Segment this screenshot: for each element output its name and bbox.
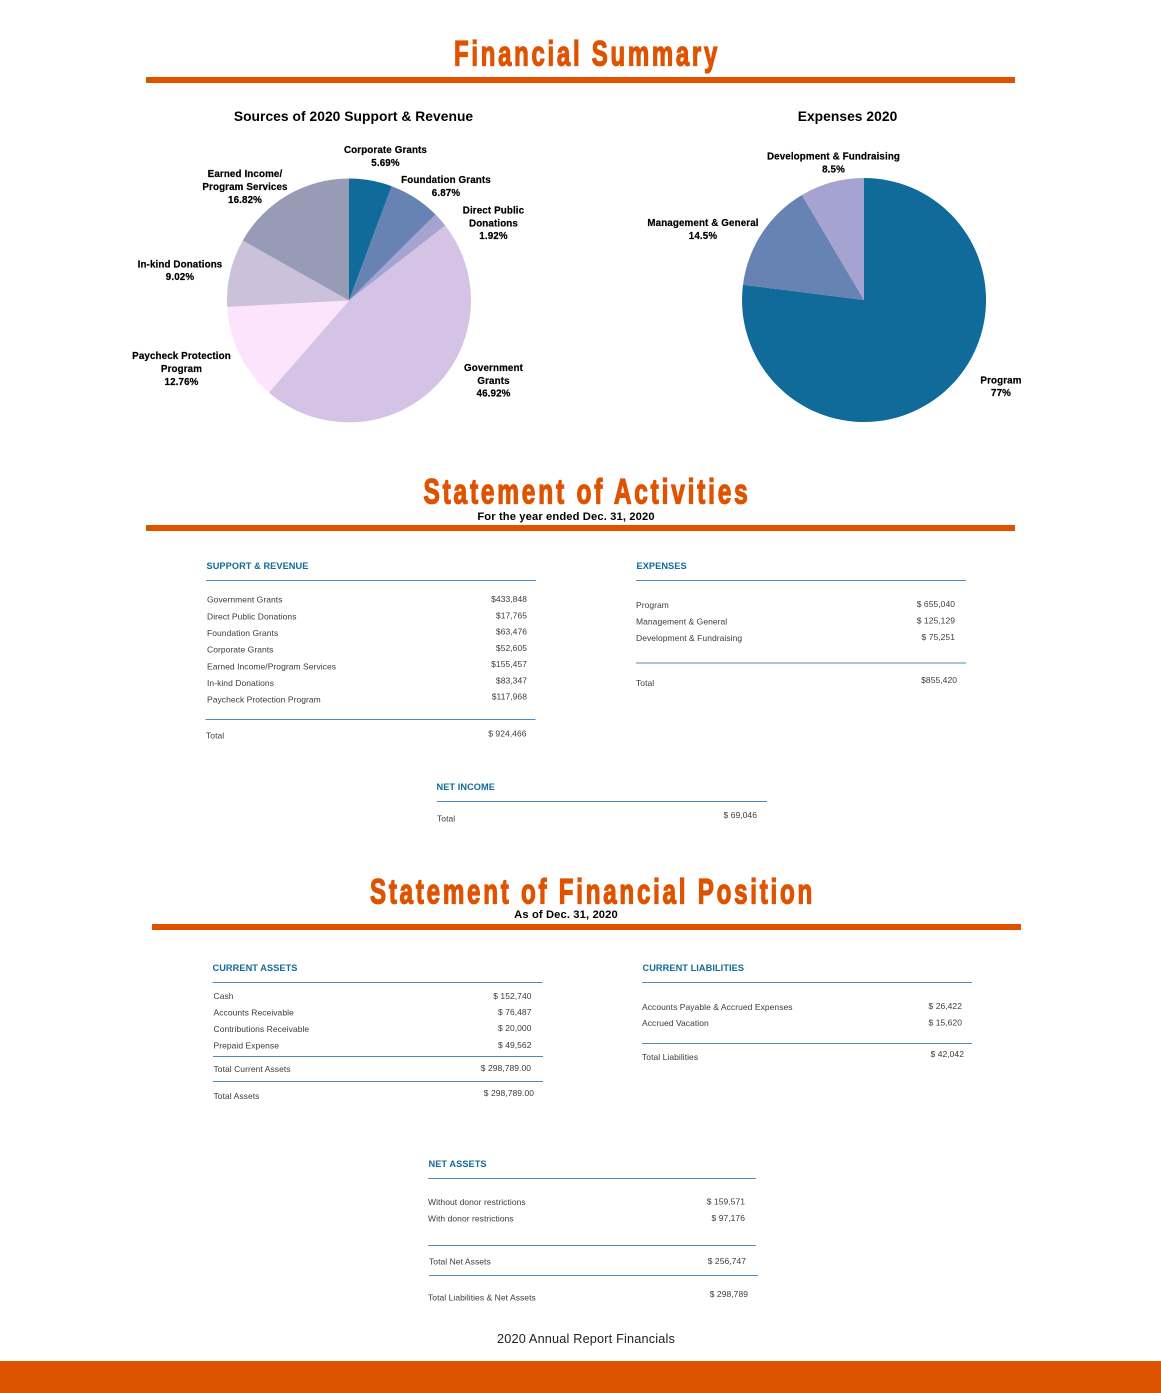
label: development and fundraising: 8.5% (822, 164, 845, 176)
label: earned income: Earned Income/ (208, 169, 282, 180)
total: Total Liabilities (642, 1052, 698, 1062)
heading: expenses 2020: Expenses 2020 (798, 109, 898, 124)
total assets: $ 298,789.00 (484, 1088, 534, 1098)
row values: $83,347 (496, 676, 527, 686)
total: $ 42,042 (930, 1049, 964, 1059)
row values: $155,457 (491, 659, 527, 669)
title: Financial Summary (146, 34, 1015, 83)
slice: corporate grants (349, 178, 392, 300)
rows: $ 26,422 (928, 1001, 962, 1011)
heading: EXPENSES (636, 561, 687, 571)
total: $855,420 (921, 675, 957, 685)
row values: $52,605 (496, 643, 527, 653)
total liabilities and net assets: $ 298,789 (710, 1289, 748, 1299)
rows (642, 1001, 962, 1028)
label: paycheck protection program: Program (161, 364, 202, 375)
rows: Program (636, 600, 669, 610)
rows (214, 991, 532, 1050)
rows: Without donor restrictions (428, 1197, 526, 1207)
slice: in-kind donations (227, 240, 349, 307)
row values: $433,848 (491, 594, 527, 604)
slice: foundation grants (349, 186, 436, 300)
title: Statement of Activities (146, 472, 1015, 531)
total: Total (206, 730, 224, 740)
label: management and general: Management & General (647, 218, 759, 229)
label: government grants: 46.92% (477, 388, 511, 400)
total liabilities and net assets (428, 1289, 748, 1302)
heading: CURRENT LIABILITIES (642, 963, 744, 973)
rows: Accrued Vacation (642, 1018, 709, 1028)
slice: program (742, 178, 986, 422)
row labels: Paycheck Protection Program (207, 694, 321, 704)
label: management and general: 14.5% (689, 231, 717, 242)
label: foundation grants: Foundation Grants (401, 175, 491, 186)
title: Statement of Activities: Statement of Activities (424, 472, 750, 512)
panel: expenses (636, 561, 966, 688)
rows: $ 125,129 (917, 616, 955, 626)
pie chart: sources of revenue (227, 178, 471, 422)
total: $ 924,466 (488, 728, 527, 738)
total (642, 1049, 964, 1062)
subtitle: as of date: As of Dec. 31, 2020 (514, 909, 618, 921)
label: corporate grants: 5.69% (371, 158, 400, 169)
slice: development and fundraising (802, 178, 864, 300)
panel: current assets (212, 963, 543, 1101)
footer band (0, 1361, 1161, 1393)
rows: $ 655,040 (917, 599, 955, 609)
row values (491, 594, 527, 702)
title: Financial Summary: Financial Summary (454, 34, 720, 74)
total: Total (437, 814, 455, 824)
total current assets: $ 298,789.00 (481, 1063, 531, 1073)
rows: Cash (214, 991, 234, 1001)
label: program: Program (980, 376, 1022, 386)
row labels: Direct Public Donations (207, 612, 296, 622)
rows: Prepaid Expense (214, 1040, 279, 1050)
row values: $117,968 (492, 692, 527, 702)
row labels: Government Grants (207, 594, 282, 604)
label: program: 77% (991, 388, 1011, 399)
heading: sources of revenue: Sources of 2020 Support & Revenue (234, 109, 473, 124)
total assets (214, 1088, 534, 1101)
rows (636, 599, 955, 643)
total net assets (429, 1256, 746, 1266)
total assets: Total Assets (214, 1091, 259, 1101)
heading: CURRENT ASSETS (212, 963, 298, 973)
total current assets: Total Current Assets (214, 1064, 291, 1074)
row labels: Earned Income/Program Services (207, 662, 336, 672)
heading: NET INCOME (436, 782, 495, 792)
title: Statement of Financial Position (152, 872, 1021, 930)
rows: Accounts Payable & Accrued Expenses (642, 1002, 793, 1012)
row values: $17,765 (496, 610, 527, 620)
label: direct public donations: Donations (469, 218, 518, 230)
total net assets: $ 256,747 (708, 1256, 746, 1266)
total: $ 69,046 (724, 810, 757, 820)
label: development and fundraising: Development & Fundraising (767, 152, 900, 162)
rows: $ 76,487 (498, 1007, 532, 1017)
slice: paycheck protection program (227, 300, 349, 392)
pie chart: expenses (742, 178, 986, 422)
label: government grants: Government (464, 363, 523, 374)
row labels (207, 594, 336, 704)
row labels: In-kind Donations (207, 678, 274, 688)
label: in-kind donations: In-kind Donations (138, 260, 222, 270)
label: paycheck protection program: Paycheck Protection (132, 351, 231, 362)
row labels: Corporate Grants (207, 644, 273, 654)
label: foundation grants: 6.87% (432, 188, 460, 199)
panel: net income (436, 782, 767, 824)
slice: earned income (243, 178, 349, 300)
rows: $ 159,571 (707, 1196, 745, 1206)
total (206, 728, 527, 740)
slice: direct public donations (349, 214, 445, 300)
slice: government grants (269, 226, 471, 422)
rows: $ 75,251 (922, 632, 955, 642)
title: Statement of Financial Position: Statement of Financial Position (370, 872, 815, 912)
label: corporate grants: Corporate Grants (344, 145, 427, 156)
row values: $63,476 (496, 626, 527, 636)
rows: With donor restrictions (428, 1214, 514, 1224)
label: direct public donations: 1.92% (479, 231, 508, 242)
rows: $ 97,176 (712, 1213, 745, 1223)
rows: $ 15,620 (928, 1018, 962, 1028)
total net assets: Total Net Assets (429, 1256, 491, 1266)
panel: current liabilities (642, 963, 972, 1062)
rows: Development & Fundraising (636, 633, 742, 643)
label: direct public donations: Direct Public (463, 206, 524, 216)
label: in-kind donations: 9.02% (166, 272, 194, 283)
label: earned income: Program Services (202, 182, 288, 193)
heading: SUPPORT & REVENUE (206, 561, 308, 571)
footer caption: 2020 Annual Report Financials (497, 1332, 675, 1346)
total current assets (214, 1063, 531, 1074)
rows: Contributions Receivable (214, 1024, 309, 1034)
rows: $ 20,000 (498, 1023, 532, 1033)
slice: management and general (743, 195, 864, 300)
subtitle: year ended: For the year ended Dec. 31, 2020 (477, 511, 655, 523)
rows: $ 49,562 (498, 1040, 532, 1050)
rows: $ 152,740 (493, 991, 532, 1001)
rows (428, 1196, 745, 1224)
label: earned income: 16.82% (228, 195, 262, 206)
panel: support and revenue (206, 561, 536, 740)
label: paycheck protection program: 12.76% (165, 377, 199, 388)
heading: NET ASSETS (428, 1159, 487, 1169)
total (437, 810, 757, 824)
row labels: Foundation Grants (207, 628, 278, 638)
rows: Accounts Receivable (214, 1008, 294, 1018)
total liabilities and net assets: Total Liabilities & Net Assets (428, 1292, 536, 1302)
total (636, 675, 957, 688)
label: government grants: Grants (477, 376, 510, 387)
panel: net assets (428, 1159, 758, 1302)
total: Total (636, 678, 654, 688)
rows: Management & General (636, 616, 727, 626)
